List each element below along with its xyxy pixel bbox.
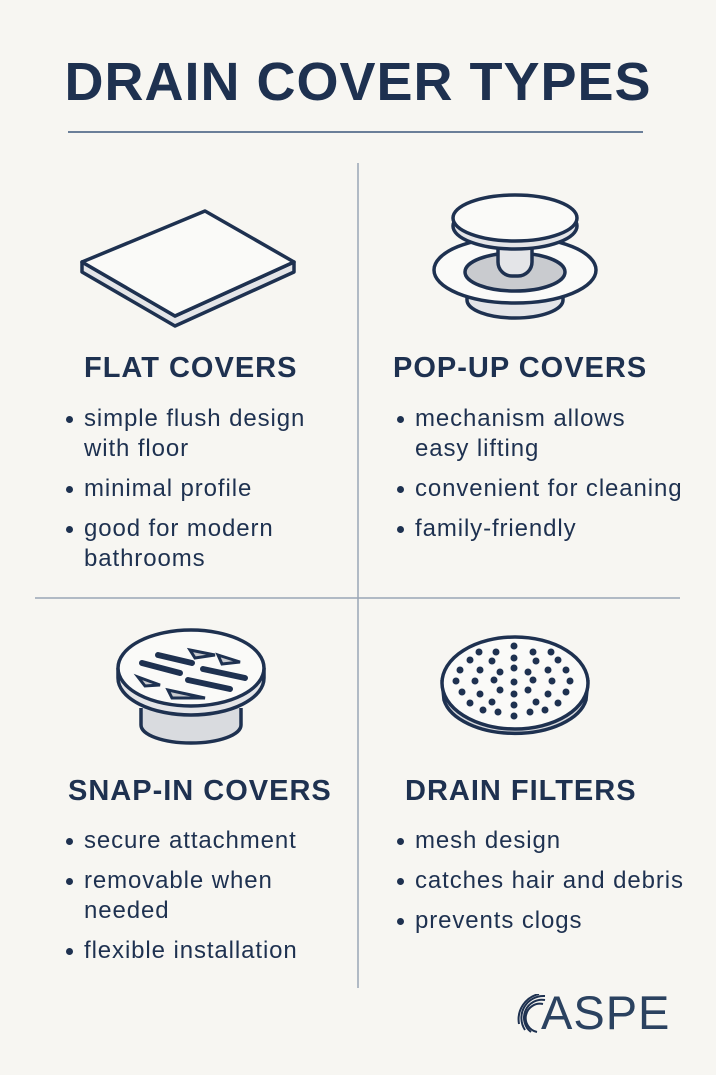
list: flat covers: simple flush design bbox=[84, 405, 305, 432]
icon: pop-up cover bbox=[432, 193, 598, 320]
list: pop-up covers: family-friendly bbox=[415, 515, 577, 542]
list: snap-in covers: removable when bbox=[84, 867, 273, 894]
logo: ASPE: ASPE bbox=[541, 986, 670, 1039]
icon: flat cover bbox=[80, 209, 296, 328]
list: snap-in covers: needed bbox=[84, 897, 170, 924]
heading: drain filters: DRAIN FILTERS bbox=[405, 775, 637, 807]
title: DRAIN COVER TYPES bbox=[64, 52, 652, 112]
list: pop-up covers bbox=[397, 405, 683, 542]
list: pop-up covers: convenient for cleaning bbox=[415, 475, 683, 502]
list: drain filters: catches hair and debris bbox=[415, 867, 684, 894]
list: flat covers: bathrooms bbox=[84, 545, 206, 572]
list: pop-up covers: easy lifting bbox=[415, 435, 539, 462]
icon: drain filter bbox=[440, 635, 590, 736]
icon: snap-in cover bbox=[116, 628, 266, 745]
heading: pop-up covers: POP-UP COVERS bbox=[393, 352, 647, 384]
list: flat covers: with floor bbox=[84, 435, 189, 462]
list: drain filters bbox=[397, 827, 684, 934]
list: drain filters: mesh design bbox=[415, 827, 561, 854]
heading: flat covers: FLAT COVERS bbox=[84, 352, 297, 384]
list: flat covers: minimal profile bbox=[84, 475, 252, 502]
list: pop-up covers: mechanism allows bbox=[415, 405, 625, 432]
list: snap-in covers: secure attachment bbox=[84, 827, 297, 854]
list: drain filters: prevents clogs bbox=[415, 907, 582, 934]
list: flat covers bbox=[66, 405, 305, 572]
list: snap-in covers: flexible installation bbox=[84, 937, 298, 964]
list: flat covers: good for modern bbox=[84, 515, 274, 542]
list: snap-in covers bbox=[66, 827, 298, 964]
heading: snap-in covers: SNAP-IN COVERS bbox=[68, 775, 332, 807]
